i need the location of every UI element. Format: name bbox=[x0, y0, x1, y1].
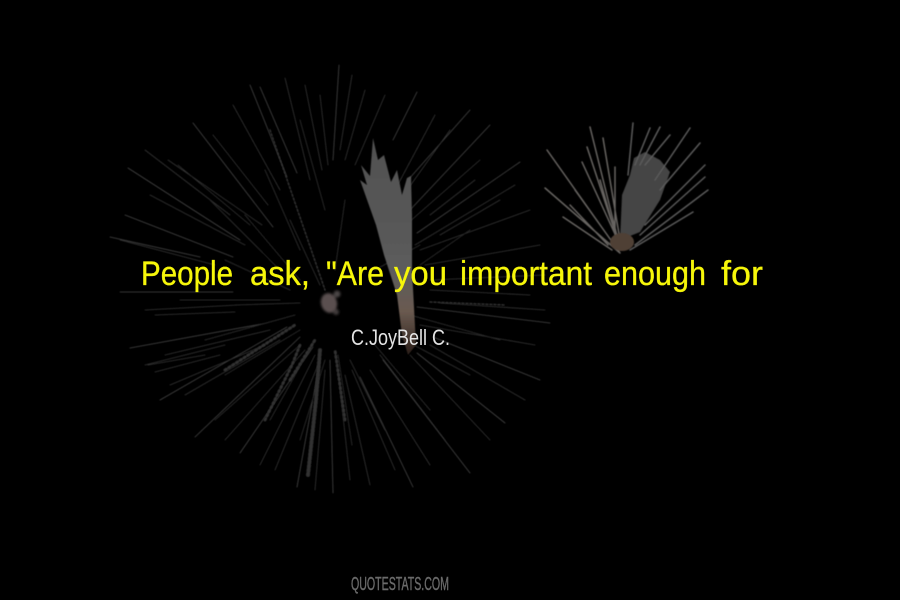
middle firework plume bbox=[360, 138, 416, 355]
burst speckled lower stream bbox=[225, 130, 505, 475]
right firework fan bbox=[545, 123, 708, 253]
quote text: important bbox=[460, 255, 593, 293]
quote text: you bbox=[394, 255, 447, 293]
quote text: enough bbox=[604, 255, 706, 293]
large firework burst bbox=[110, 65, 550, 493]
burst core bbox=[319, 290, 340, 315]
author: C.JoyBell C. bbox=[351, 325, 450, 350]
quote text: "Are bbox=[326, 255, 384, 293]
site watermark: QUOTESTATS.COM bbox=[351, 574, 449, 594]
quote text: People bbox=[141, 255, 233, 293]
quote text bbox=[141, 255, 763, 293]
quote text: ask, bbox=[250, 255, 310, 293]
quote text: for bbox=[721, 255, 763, 293]
